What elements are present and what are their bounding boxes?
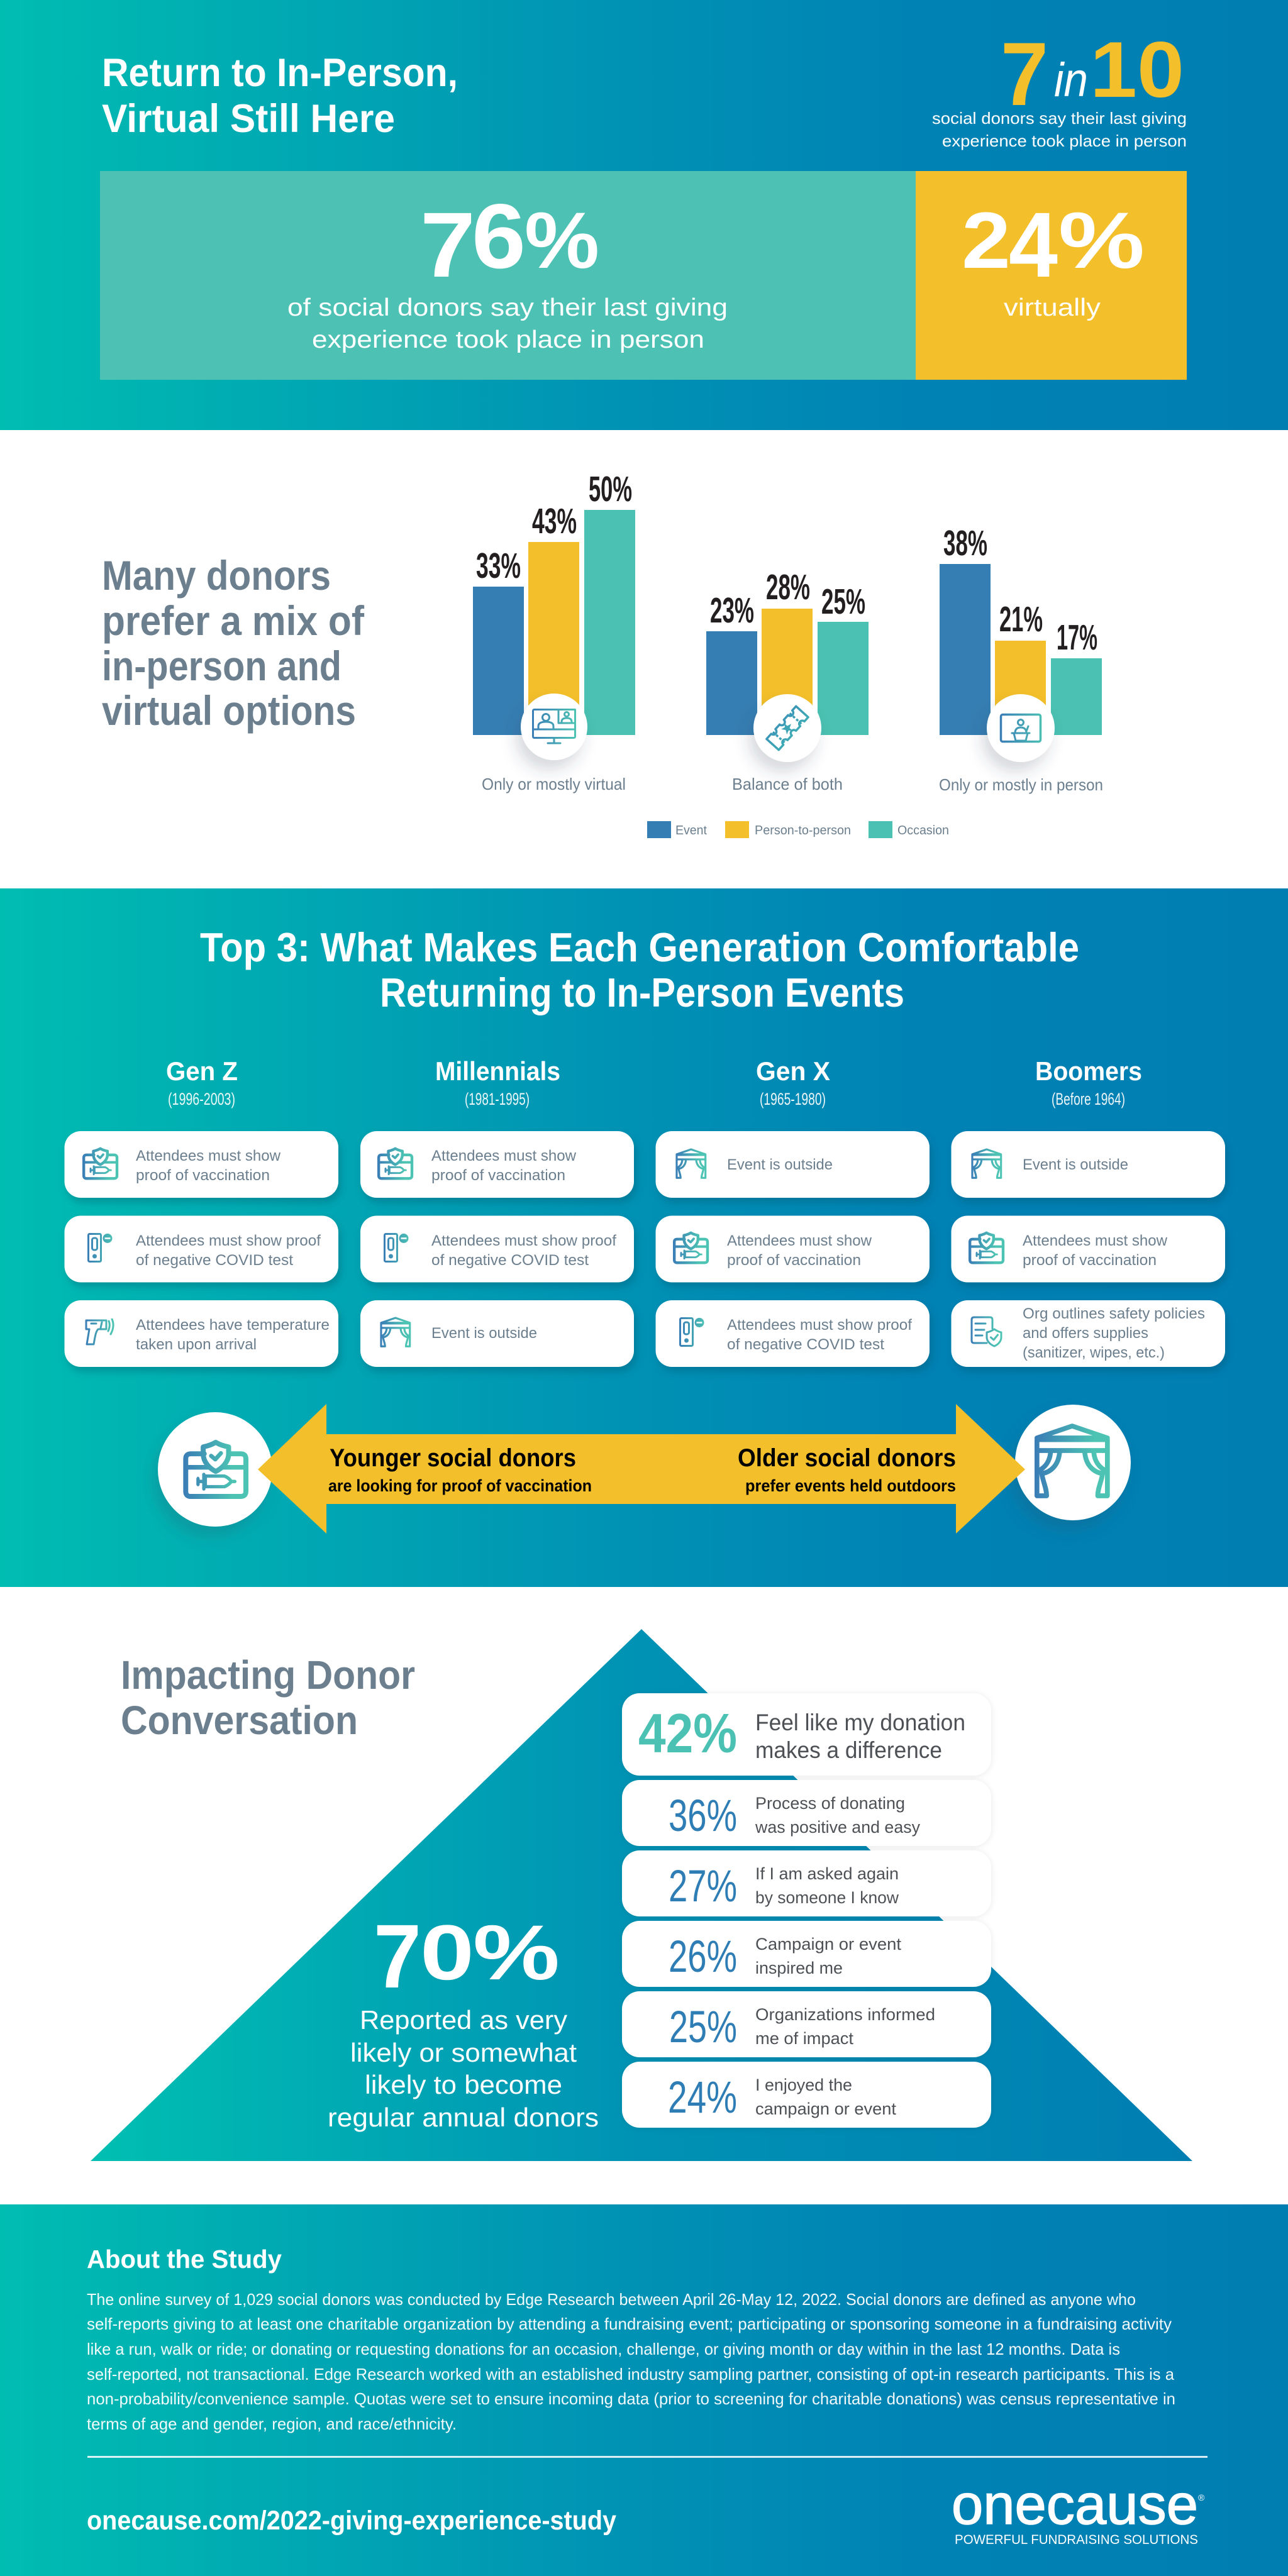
- column headings: generations: Gen Z: [166, 1056, 238, 1086]
- title: return to in-person: [102, 51, 458, 141]
- panel: boomers cards: Org outlines safety policies: [1023, 1305, 1205, 1322]
- column headings: generations: (1996-2003): [168, 1090, 235, 1108]
- panel: gen z cards: taken upon arrival: [136, 1336, 257, 1353]
- bar chart: only or mostly in person: 17%: [1057, 617, 1097, 658]
- text block: study description: [87, 2290, 1175, 2433]
- callout: 70% likely to become donors: 7: [374, 1906, 421, 2007]
- arrow: younger to older: Younger social donors: [330, 1444, 576, 1472]
- card: 36%: 36%: [669, 1791, 737, 1841]
- arrow: younger to older: prefer events held outdoors: [745, 1476, 956, 1495]
- bar chart: only or mostly virtual: [473, 469, 635, 793]
- panel: gen z cards: of negative COVID test: [136, 1252, 293, 1269]
- panel: gen z cards: Attendees must show proof: [136, 1232, 321, 1249]
- column headings: generations: Gen X: [756, 1056, 830, 1086]
- text block: study description: like a run, walk or ride; or donating or requesting donations for an occasion, challenge, or giving month or day within in the last 12 months. Data is: [87, 2340, 1120, 2358]
- link: study url: onecause.com/2022-giving-experience-study: [87, 2506, 616, 2536]
- card: 24%: 24%: [668, 2073, 737, 2123]
- logo: onecause: ®: [1198, 2492, 1205, 2502]
- panel: 24% virtually: [916, 171, 1187, 380]
- arrow: younger to older: [258, 1404, 1025, 1534]
- card: 25%: 25%: [669, 2003, 737, 2052]
- column headings: generations: (Before 1964): [1052, 1090, 1125, 1108]
- heading: impacting donor conversation: Conversation: [121, 1698, 358, 1743]
- bar chart: only or mostly virtual: 50%: [589, 469, 632, 509]
- panel: 76% in person: 7: [420, 194, 475, 297]
- panel: 76% in person: [100, 171, 916, 380]
- panel: boomers cards: Attendees must show: [1023, 1232, 1168, 1249]
- bar chart: only or mostly virtual: 33%: [476, 546, 521, 586]
- heading: impacting donor conversation: [121, 1652, 415, 1743]
- section background: return to in-person: [0, 0, 1288, 430]
- bar chart: only or mostly in person: [939, 523, 1103, 794]
- legend: Occasion: [897, 824, 949, 837]
- column headings: generations: (1965-1980): [760, 1090, 826, 1108]
- panel: gen x cards: Event is outside: [727, 1156, 833, 1173]
- panel: 76% in person: %: [525, 196, 599, 285]
- callout: 70% likely to become donors: 0: [420, 1910, 474, 1996]
- card: 27%: If I am asked again: [755, 1864, 899, 1883]
- heading: top 3: Top 3: What Makes Each Generation Comfortable: [200, 924, 1079, 970]
- panel: gen x cards: proof of vaccination: [727, 1252, 861, 1269]
- logo: onecause: POWERFUL FUNDRAISING SOLUTIONS: [955, 2533, 1198, 2547]
- card: 26%: 26%: [669, 1932, 737, 1982]
- panel: 24% virtually: %: [1058, 196, 1145, 285]
- callout: 70% likely to become donors: Reported as very: [360, 2005, 567, 2035]
- icon: video call monitor: [533, 709, 575, 743]
- callout: 70% likely to become donors: likely to become: [365, 2070, 562, 2099]
- panel: millennials cards: Attendees must show proof: [431, 1232, 616, 1249]
- arrow: younger to older: Older social donors: [738, 1444, 956, 1472]
- card: 42%: Feel like my donation: [755, 1710, 965, 1735]
- bar chart: only or mostly in person: 21%: [999, 599, 1043, 639]
- card: 26%: [622, 1921, 991, 1987]
- text block: study description: terms of age and gender, region, and race/ethnicity.: [87, 2414, 457, 2433]
- panel: millennials cards: of negative COVID test: [431, 1252, 589, 1269]
- card: 42%: 42%: [638, 1702, 737, 1764]
- section background: about the study: [0, 2204, 1288, 2576]
- panel: gen x cards: Attendees must show proof: [727, 1317, 912, 1334]
- bar chart: only or mostly virtual: 43%: [532, 501, 577, 541]
- text block: study description: non-probability/convenience sample. Quotas were set to ensure incoming data (prior to screening for charitable donations) was census representative in: [87, 2389, 1175, 2408]
- panel: boomers cards: proof of vaccination: [1023, 1252, 1157, 1269]
- icon: ticket: [767, 706, 808, 750]
- bar chart: only or mostly virtual: Only or mostly virtual: [482, 775, 626, 793]
- heading: impacting donor conversation: Impacting Donor: [121, 1652, 415, 1698]
- title: return to in-person: Return to In-Person,: [102, 51, 458, 95]
- bar chart: balance of both: [706, 567, 869, 793]
- title: return to in-person: Virtual Still Here: [102, 97, 395, 141]
- card: 25%: [622, 1991, 991, 2057]
- callout: 7 in 10: social donors say their last giving: [932, 109, 1187, 128]
- panel: 24% virtually: virtually: [1004, 294, 1101, 321]
- panel: boomers cards: and offers supplies: [1023, 1325, 1148, 1342]
- card: 25%: Organizations informed: [755, 2005, 935, 2024]
- card: 24%: I enjoyed the: [755, 2076, 852, 2094]
- callout: 70% likely to become donors: likely or somewhat: [350, 2038, 577, 2067]
- panel: millennials cards: Attendees must show: [431, 1147, 577, 1164]
- panel: millennials cards: [360, 1131, 634, 1367]
- card: 42%: makes a difference: [755, 1737, 942, 1763]
- bar chart: balance of both: 28%: [766, 567, 810, 607]
- callout: 7 in 10: 7: [1001, 25, 1048, 124]
- panel: 76% in person: of social donors say their last giving: [287, 294, 728, 321]
- icon: in-person presenter: [1001, 714, 1040, 742]
- legend: Person-to-person: [755, 824, 851, 837]
- card: 24%: campaign or event: [755, 2099, 896, 2118]
- text block: study description: The online survey of 1,029 social donors was conducted by Edge Research between April 26-May 12, 2022. Social donors are defined as anyone who: [87, 2290, 1136, 2309]
- card: 36%: [622, 1780, 991, 1846]
- card: 36%: Process of donating: [755, 1794, 905, 1813]
- callout: 70% likely to become donors: %: [473, 1910, 560, 1996]
- bar chart: only or mostly in person: Only or mostly in person: [939, 775, 1103, 794]
- panel: gen z cards: [64, 1131, 338, 1367]
- bar chart: balance of both: Balance of both: [732, 775, 843, 793]
- panel: gen z cards: Attendees must show: [136, 1147, 281, 1164]
- heading: many donors prefer a mix: virtual options: [102, 687, 356, 734]
- panel: gen z cards: Attendees have temperature: [136, 1317, 330, 1334]
- panel: gen x cards: of negative COVID test: [727, 1336, 884, 1353]
- panel: 24% virtually: 4: [1009, 194, 1058, 297]
- column headings: generations: Boomers: [1035, 1056, 1142, 1086]
- text block: study description: self-reported, not transactional. Edge Research worked with an established industry sampling partner, consisting of opt-in research participants. This is a: [87, 2365, 1175, 2384]
- card: 26%: inspired me: [755, 1959, 843, 1977]
- callout: 7 in 10: [932, 25, 1187, 150]
- bar chart: balance of both: 25%: [821, 582, 865, 622]
- column headings: generations: [166, 1056, 1142, 1108]
- panel: gen x cards: [655, 1131, 930, 1367]
- heading: many donors prefer a mix: [102, 552, 365, 734]
- heading: about the study: About the Study: [87, 2245, 282, 2274]
- heading: many donors prefer a mix: Many donors: [102, 552, 331, 599]
- card: 42%: [622, 1693, 991, 1776]
- card: 36%: was positive and easy: [755, 1818, 920, 1837]
- heading: many donors prefer a mix: in-person and: [102, 643, 341, 689]
- callout: 70% likely to become donors: regular annual donors: [328, 2103, 599, 2132]
- bar chart: only or mostly in person: 38%: [943, 523, 987, 563]
- column headings: generations: (1981-1995): [465, 1090, 530, 1108]
- card: 27%: by someone I know: [755, 1888, 899, 1907]
- panel: millennials cards: proof of vaccination: [431, 1167, 565, 1184]
- section background: generations: [0, 888, 1288, 1587]
- card: 25%: me of impact: [755, 2029, 853, 2048]
- text block: study description: self-reports giving to at least one charitable organization by attending a fundraising event; participating or sponsoring someone in a fundraising activity: [87, 2314, 1172, 2333]
- panel: gen x cards: Attendees must show: [727, 1232, 872, 1249]
- heading: many donors prefer a mix: prefer a mix of: [102, 597, 365, 644]
- icon: older donors outdoor tent: [1015, 1405, 1131, 1520]
- panel: 76% in person: 6: [472, 185, 526, 287]
- panel: 24% virtually: 2: [962, 196, 1011, 285]
- heading: top 3: Returning to In-Person Events: [380, 970, 904, 1015]
- card: 27%: [622, 1850, 991, 1916]
- arrow: younger to older: are looking for proof of vaccination: [328, 1476, 592, 1495]
- column headings: generations: Millennials: [435, 1056, 560, 1086]
- panel: boomers cards: [951, 1131, 1225, 1367]
- card: 27%: 27%: [669, 1862, 737, 1911]
- callout: 7 in 10: 10: [1090, 25, 1184, 114]
- callout: 7 in 10: experience took place in person: [942, 131, 1187, 150]
- bar chart: balance of both: 23%: [710, 590, 754, 631]
- icon: younger donors vaccination card: [158, 1412, 272, 1527]
- legend: Event: [675, 824, 707, 837]
- legend: [647, 821, 949, 838]
- triangle: impact pyramid: [91, 1629, 1192, 2161]
- logo: onecause: onecause: [952, 2474, 1198, 2536]
- panel: boomers cards: (sanitizer, wipes, etc.): [1023, 1344, 1165, 1361]
- panel: millennials cards: Event is outside: [431, 1325, 537, 1342]
- panel: 76% in person: experience took place in person: [312, 326, 704, 353]
- panel: boomers cards: Event is outside: [1023, 1156, 1128, 1173]
- card: 26%: Campaign or event: [755, 1935, 901, 1954]
- card: 24%: [622, 2062, 991, 2128]
- panel: gen z cards: proof of vaccination: [136, 1167, 270, 1184]
- callout: 70% likely to become donors: [328, 1906, 599, 2132]
- heading: top 3: [200, 924, 1079, 1015]
- callout: 7 in 10: in: [1054, 53, 1088, 107]
